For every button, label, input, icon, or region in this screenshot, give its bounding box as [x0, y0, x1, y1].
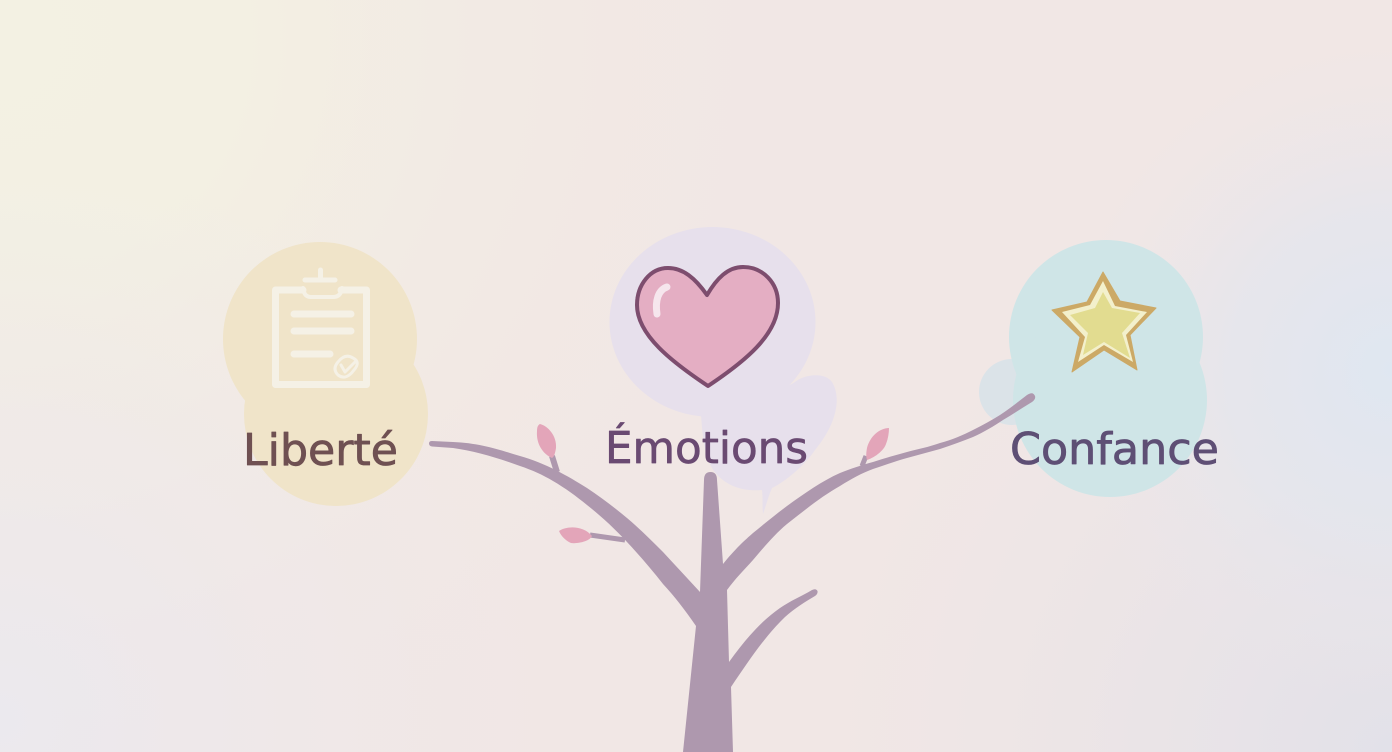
panel: Confiance — [979, 240, 1219, 497]
panel: Émotions — [605, 227, 837, 514]
label: Liberté: Liberté — [243, 425, 398, 476]
icon: star — [1052, 272, 1156, 372]
leaf: left lower — [559, 527, 592, 543]
twig: left upper — [552, 456, 557, 472]
blob: Confiance background — [979, 240, 1207, 497]
tree trunk and branches — [429, 393, 1035, 752]
icon: heart — [637, 267, 778, 386]
twig: left lower — [590, 535, 625, 540]
icon: clipboard — [276, 270, 366, 384]
blob: Liberté background — [223, 242, 428, 506]
label: Émotions: Émotions — [605, 421, 808, 474]
panel: Liberté — [223, 242, 428, 506]
twig: right — [862, 456, 866, 466]
label: Confance: Confance — [1010, 424, 1219, 475]
leaf: left upper — [537, 424, 556, 458]
speech bubble — [610, 227, 837, 514]
tree — [429, 393, 1035, 752]
leaf: right — [866, 428, 889, 460]
